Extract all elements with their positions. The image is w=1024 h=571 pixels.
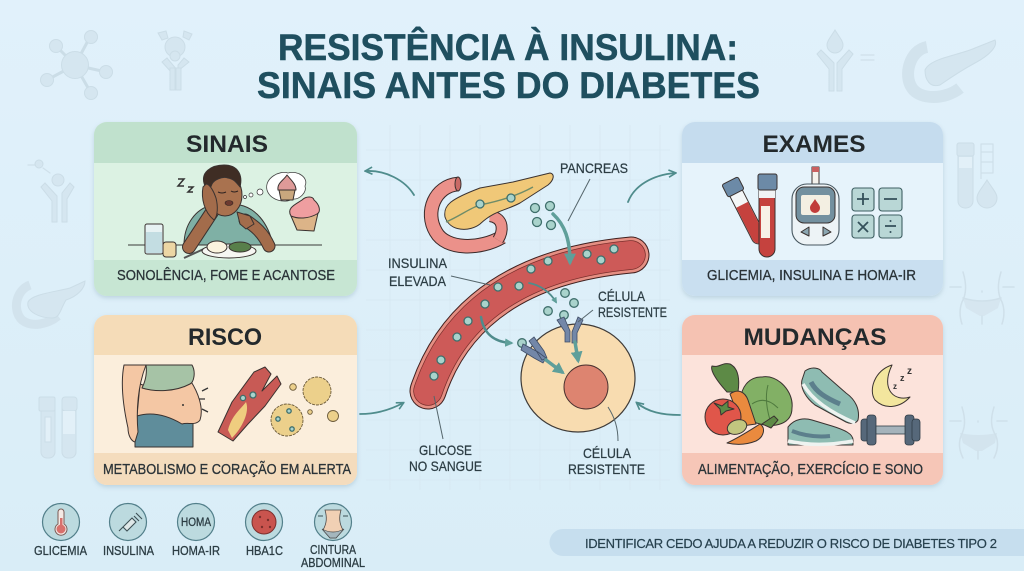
icon: moon and sleep [872, 365, 912, 406]
icon: dumbbell [861, 415, 920, 445]
legend item: glicemia: GLICEMIA [34, 544, 88, 558]
icon: glucose meter [792, 167, 839, 245]
legend item: cintura abdominal: CINTURA [310, 543, 357, 557]
icon: moon and sleep: z [893, 382, 897, 391]
background icon: left test tubes [39, 397, 77, 458]
heading: risco: RISCO [188, 324, 262, 351]
diagram: pancreas [431, 173, 553, 246]
label: pancreas: PANCREAS [560, 160, 628, 176]
panel: sinais [94, 122, 357, 296]
background icon: left antibody [28, 160, 74, 222]
legend item: homa-ir: HOMA [181, 517, 211, 529]
legend [34, 504, 365, 570]
label: glicose no sangue: NO SANGUE [409, 458, 482, 474]
icon: vegetables [705, 364, 792, 444]
background icon: lower waist [950, 407, 1007, 459]
label: insulina elevada [388, 255, 448, 289]
diagram: resistant cell [521, 324, 635, 432]
caption: risco: METABOLISMO E CORAÇÃO EM ALERTA [103, 461, 351, 478]
caption: sinais: SONOLÊNCIA, FOME E ACANTOSE [117, 267, 335, 284]
caption: mudanças: ALIMENTAÇÃO, EXERCÍCIO E SONO [698, 461, 923, 478]
icon: moon and sleep: z [907, 366, 912, 377]
legend item: cintura abdominal [301, 504, 365, 570]
icon: blood tubes [722, 174, 777, 257]
arrow: from risco [360, 403, 403, 414]
label: glicose no sangue [409, 442, 482, 474]
icon: abdominal fat [122, 365, 208, 447]
legend item: hba1c [246, 504, 283, 558]
label: célula resistente top: RESISTENTE [598, 304, 667, 320]
title: RESISTÊNCIA À INSULINA: [278, 26, 738, 68]
label: célula resistente top: CÉLULA [598, 288, 646, 304]
insulin dots in vessel [430, 245, 618, 380]
panel: risco [94, 315, 357, 485]
legend item: homa-ir [172, 504, 220, 558]
background icon: pancreas [908, 40, 996, 97]
legend item: glicemia [34, 504, 88, 558]
diagram: blood vessel [428, 255, 631, 391]
cupcake [290, 197, 319, 231]
title [257, 26, 760, 106]
legend item: insulina [103, 504, 155, 558]
arrow: to sinais [366, 171, 414, 195]
insulin dots released [518, 202, 601, 358]
background icon: receptor and drop [817, 30, 874, 91]
label: célula resistente bottom [568, 445, 645, 477]
panel: mudanças [682, 315, 943, 485]
legend item: homa-ir: HOMA-IR [172, 544, 220, 558]
background icon: right test tubes and drop [957, 143, 997, 208]
title: SINAIS ANTES DO DIABETES [257, 65, 760, 106]
callout banner [550, 529, 1024, 556]
icon: fat cells [271, 377, 338, 436]
icon: clogged artery [218, 367, 281, 441]
background icon: waist [950, 272, 1014, 324]
thought bubble with cupcake [244, 172, 306, 201]
label: glicose no sangue: GLICOSE [419, 442, 472, 458]
caption: exames: GLICEMIA, INSULINA E HOMA-IR [707, 267, 916, 284]
legend item: insulina: INSULINA [103, 544, 155, 558]
arrows: insulin flow [481, 214, 578, 372]
label: célula resistente bottom: RESISTENTE [568, 461, 645, 477]
label: célula resistente top [598, 288, 667, 320]
heading: mudanças: MUDANÇAS [744, 324, 886, 351]
glass of water [145, 224, 163, 254]
icon: calculator buttons [852, 188, 902, 238]
legend item: hba1c: HBA1C [246, 544, 283, 558]
panel: exames [682, 122, 943, 296]
arrow: from mudanças [637, 403, 680, 415]
legend item: cintura abdominal: ABDOMINAL [301, 556, 365, 570]
background icon: molecule [40, 30, 112, 100]
icon: running shoes [788, 368, 858, 445]
label: célula resistente bottom: CÉLULA [583, 445, 632, 461]
leader lines [434, 179, 618, 441]
receptors [521, 317, 583, 363]
background icon: left pancreas [16, 281, 85, 324]
heading: sinais: SINAIS [186, 131, 268, 158]
background icon: antibody with hormone [158, 31, 192, 90]
callout banner: IDENTIFICAR CEDO AJUDA A REDUZIR O RISCO DE DIABETES TIPO 2 [585, 536, 997, 551]
label: insulina elevada: INSULINA [388, 255, 448, 271]
icon: sleepy hungry person [128, 165, 322, 258]
heading: exames: EXAMES [762, 131, 866, 158]
arrow: to exames [628, 173, 675, 202]
icon: moon and sleep: z [900, 373, 905, 383]
label: insulina elevada: ELEVADA [389, 273, 447, 289]
